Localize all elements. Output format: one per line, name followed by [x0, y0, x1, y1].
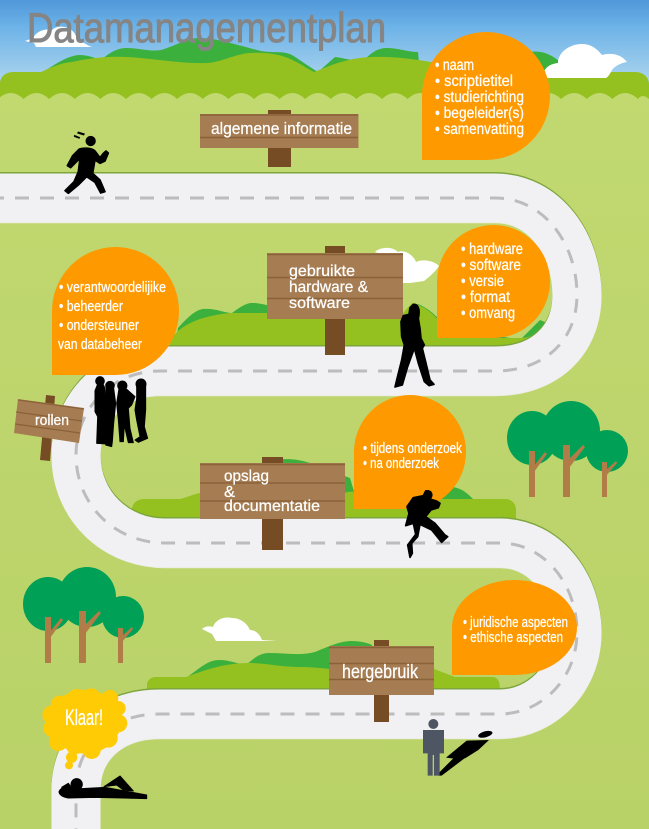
cloud: behind sign 2 [375, 248, 439, 283]
hills: opslag [132, 459, 516, 520]
callout: rollen: van databeheer [58, 336, 142, 353]
callout: hardware en software: • hardware [461, 241, 523, 258]
callout: rollen: • ondersteuner [59, 317, 139, 334]
sign: algemene informatie [200, 110, 358, 167]
figure: jumping man [406, 491, 448, 557]
cloud: top left [25, 27, 92, 47]
sign: gebruikte hardware en software: hardware & [289, 279, 368, 296]
sign: opslag en documentatie [200, 457, 345, 550]
callout: hardware en software: • versie [461, 273, 504, 290]
callout: hergebruik [452, 580, 577, 675]
callout: rollen [52, 247, 179, 375]
hills: middle right [175, 303, 552, 350]
sign: gebruikte hardware en software [267, 246, 403, 355]
background: sky [0, 0, 649, 90]
sign: gebruikte hardware en software: software [289, 295, 350, 312]
thought bubble: Klaar!: Klaar! [65, 705, 103, 730]
callout: hergebruik: • ethische aspecten [463, 629, 563, 646]
sign: algemene informatie: algemene informatie [211, 119, 352, 138]
sign: opslag en documentatie: documentatie [224, 498, 320, 515]
road [0, 196, 577, 829]
hills: top dark [40, 38, 570, 76]
callout: algemene informatie: • begeleider(s) [435, 105, 524, 122]
thought bubble: Klaar! [42, 688, 127, 769]
sign: rollen: rollen [35, 412, 69, 429]
callout: algemene informatie [422, 32, 550, 160]
callout: opslag [354, 395, 466, 509]
sign: rollen [14, 395, 84, 461]
callout: algemene informatie: • scriptietitel [435, 73, 513, 90]
callout: hergebruik: • juridische aspecten [463, 614, 568, 631]
cloud: top right [544, 44, 627, 78]
sign: hergebruik: hergebruik [342, 662, 418, 683]
callout: hardware en software: • software [461, 257, 521, 274]
figure: woman walking [395, 304, 434, 387]
cloud: lower left [202, 617, 277, 641]
title: Datamanagementplan [27, 4, 386, 51]
figure: group of people [95, 377, 148, 447]
callout: hardware en software [437, 225, 550, 338]
trees: right group [507, 401, 628, 497]
callout: opslag: • na onderzoek [363, 455, 439, 472]
hills: middle right band [170, 303, 554, 350]
sign: opslag en documentatie: opslag [224, 468, 269, 485]
hills: hergebruik [147, 641, 500, 690]
figure: person lying down [59, 776, 147, 799]
callout: hardware en software: • format [461, 289, 510, 306]
sign: opslag en documentatie: & [224, 484, 235, 501]
callout: algemene informatie: • studierichting [435, 89, 524, 106]
callout: rollen: • verantwoordelijike [59, 279, 166, 296]
callout: algemene informatie: • naam [435, 57, 474, 74]
sign: hergebruik [329, 640, 434, 722]
callout: opslag: • tijdens onderzoek [363, 440, 462, 457]
callout: rollen: • beheerder [59, 298, 123, 315]
trees: left group [23, 567, 144, 663]
callout: algemene informatie: • samenvatting [435, 121, 524, 138]
sign: gebruikte hardware en software: gebruikte [289, 263, 355, 280]
hills: top band with scalloped edge [0, 53, 649, 99]
callout: hardware en software: • omvang [461, 305, 515, 322]
figure: runner [65, 132, 108, 193]
figure: standing man with shadow [423, 719, 493, 776]
